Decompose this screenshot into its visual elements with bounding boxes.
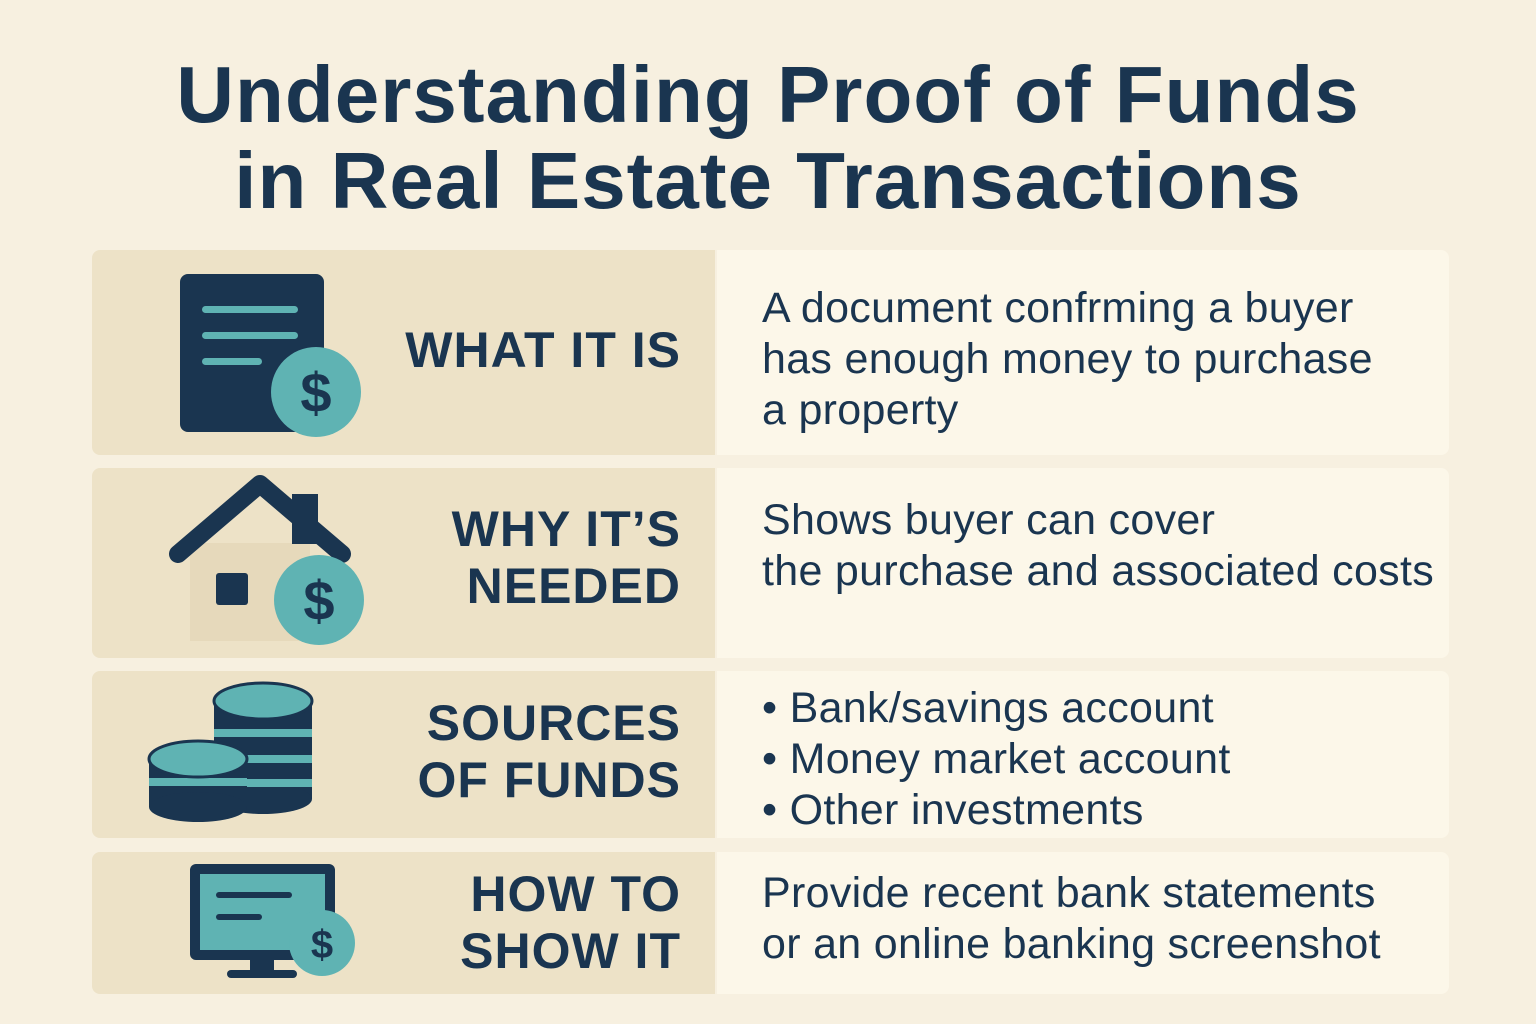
label: [460, 866, 681, 979]
icon: house with dollar: [169, 475, 364, 645]
description list: • Money market account: [762, 735, 1231, 783]
icon: coin stacks: [148, 682, 314, 822]
description: or an online banking screenshot: [762, 920, 1381, 968]
description: a property: [762, 386, 959, 434]
title: Understanding Proof of Funds: [176, 50, 1360, 139]
icon: house with dollar: $: [303, 569, 335, 632]
label: SHOW IT: [460, 923, 681, 979]
label: WHAT IT IS: [405, 322, 681, 378]
row: how to show it: [92, 852, 1449, 994]
icon: monitor with dollar: $: [311, 923, 333, 967]
row: why it's needed: [92, 468, 1449, 658]
description list: • Bank/savings account: [762, 684, 1214, 732]
description: the purchase and associated costs: [762, 547, 1434, 595]
label: WHY IT’S: [452, 501, 681, 557]
description: Provide recent bank statements: [762, 869, 1376, 917]
label: NEEDED: [467, 558, 681, 614]
title: [176, 50, 1360, 225]
description list: [762, 684, 1231, 834]
icon: monitor with dollar: [190, 864, 355, 978]
label: OF FUNDS: [417, 752, 681, 808]
description: A document confrming a buyer: [762, 284, 1354, 332]
row: sources of funds: [92, 671, 1449, 838]
title: in Real Estate Transactions: [234, 136, 1302, 225]
description: [762, 496, 1434, 595]
label: SOURCES: [427, 695, 681, 751]
icon: document with dollar: [180, 274, 361, 437]
label: [417, 695, 681, 808]
label: HOW TO: [470, 866, 681, 922]
description: has enough money to purchase: [762, 335, 1373, 383]
description list: • Other investments: [762, 786, 1144, 834]
description: Shows buyer can cover: [762, 496, 1215, 544]
label: [452, 501, 681, 614]
icon: document with dollar: $: [300, 361, 332, 424]
description: [762, 869, 1381, 968]
description: [762, 284, 1373, 434]
row: what it is: [92, 250, 1449, 455]
